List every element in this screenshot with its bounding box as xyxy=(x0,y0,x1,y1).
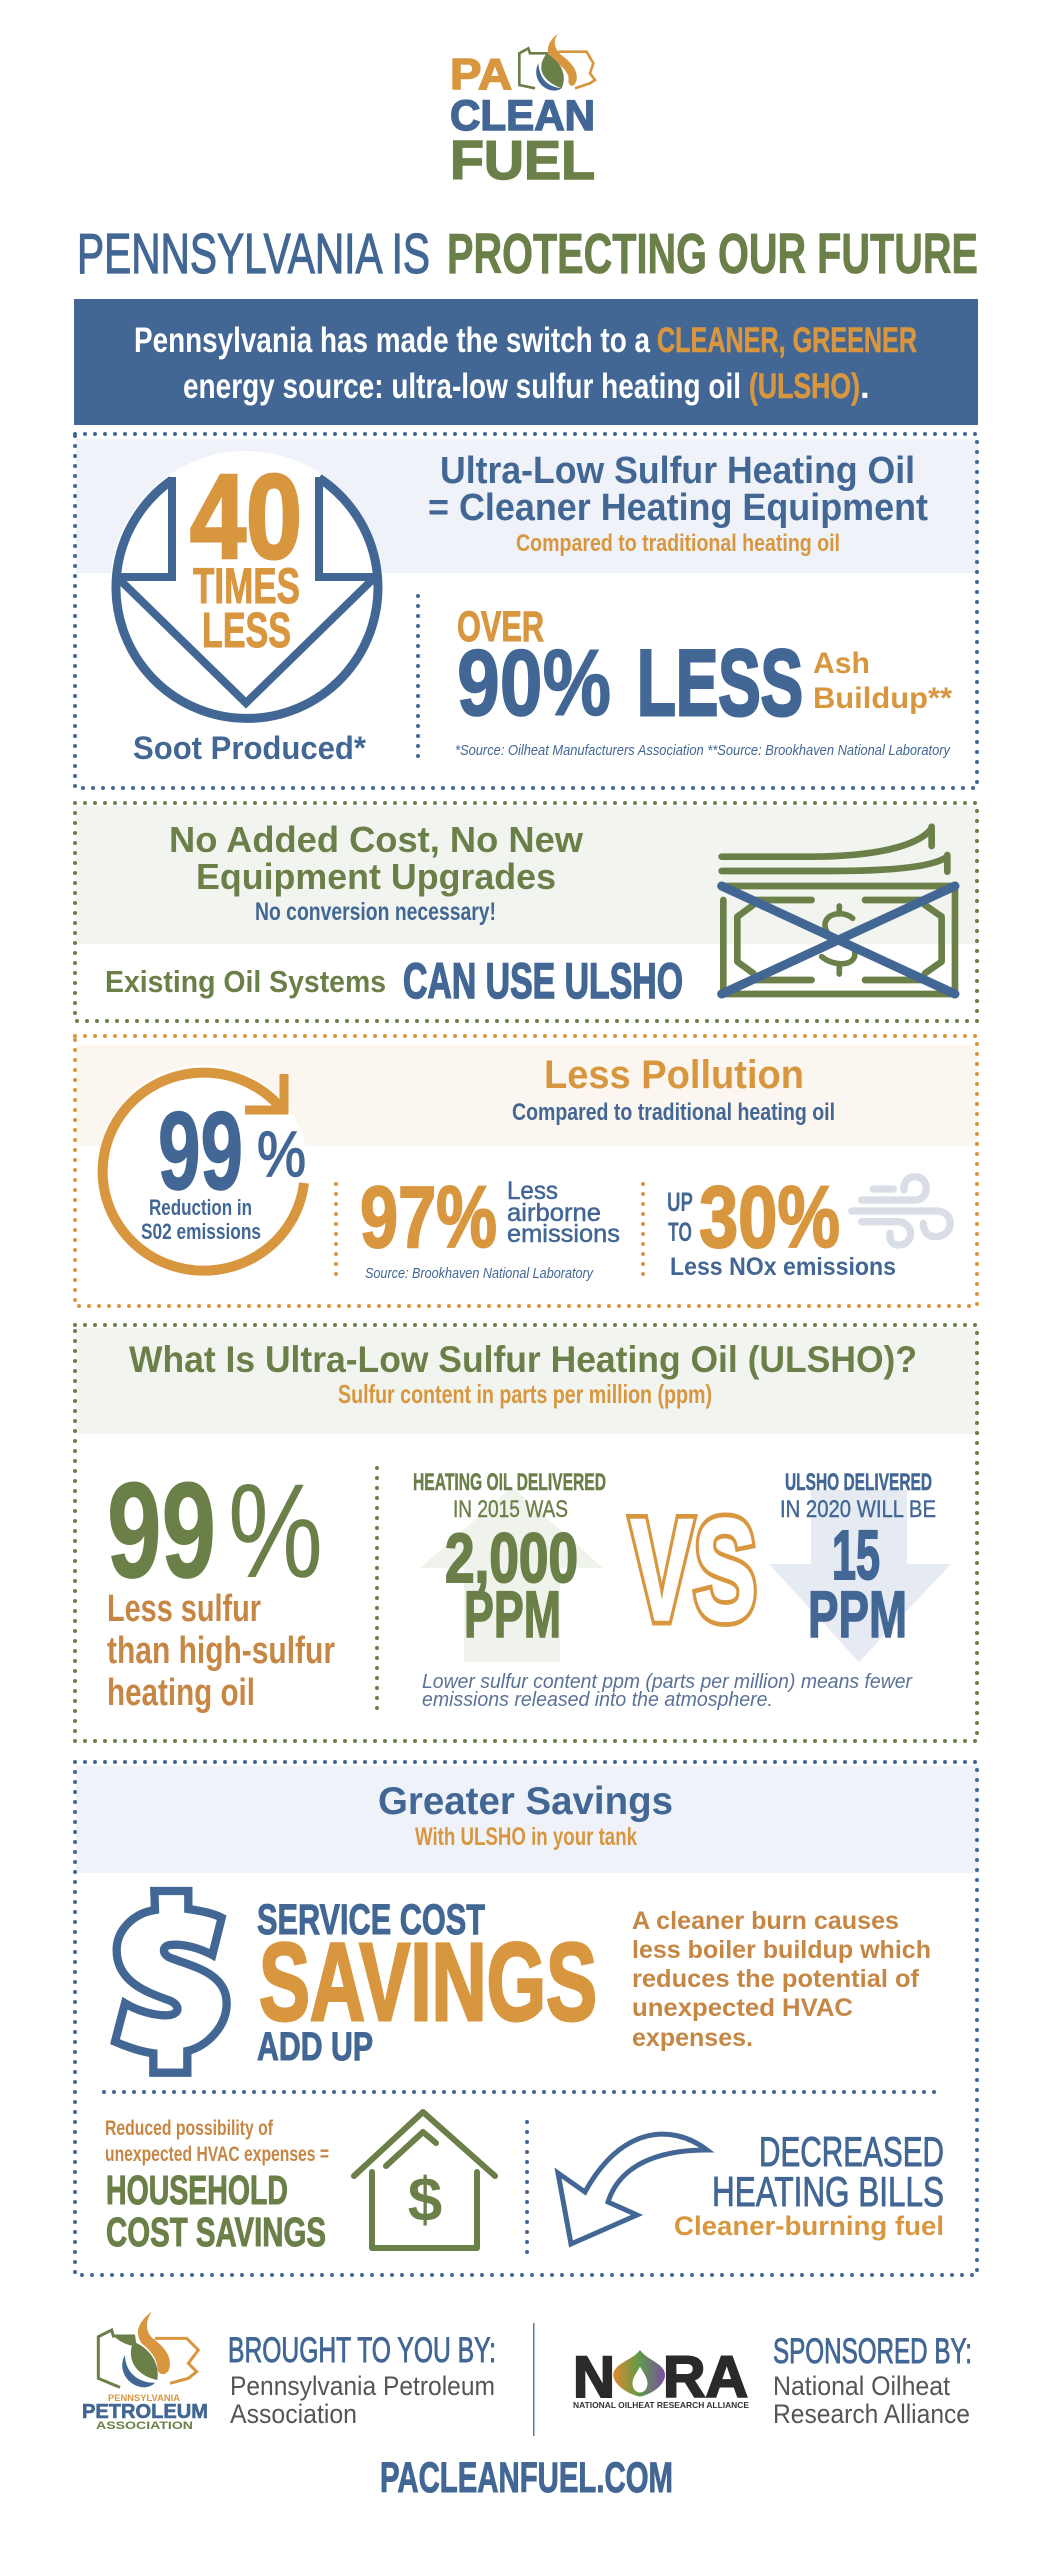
text: household cost savings: unexpected HVAC expenses = xyxy=(105,2143,329,2166)
comparison: 2015 heating oil 2,000 ppm: PPM xyxy=(464,1577,561,1651)
logo: Pennsylvania Petroleum Association: PENNSYLVANIA xyxy=(108,2393,181,2403)
heading: cleaner heating equipment xyxy=(428,450,928,557)
logo: NORA: NATIONAL OILHEAT RESEARCH ALLIANCE xyxy=(573,2400,749,2410)
heading: cleaner heating equipment: Compared to traditional heating oil xyxy=(516,530,840,557)
text: household cost savings: HOUSEHOLD xyxy=(106,2167,288,2213)
text: service cost savings add up: SERVICE COST xyxy=(257,1896,485,1944)
heading: less pollution: Compared to traditional heating oil xyxy=(512,1099,835,1126)
logo: PA Clean Fuel: CLEAN xyxy=(450,92,595,140)
text: existing oil systems can use ULSHO: CAN USE ULSHO xyxy=(403,953,683,1009)
text: decreased heating bills: DECREASED xyxy=(759,2128,944,2175)
note: lower sulfur content: emissions released into the atmosphere. xyxy=(422,1689,773,1711)
stat: 99% less sulfur: Less sulfur xyxy=(107,1588,261,1630)
stat: up to 30% less NOx: UP xyxy=(667,1187,693,1217)
icon: circle with down arrow xyxy=(110,451,382,723)
text: decreased heating bills: HEATING BILLS xyxy=(712,2168,944,2215)
comparison: 2015 heating oil 2,000 ppm: 2,000 xyxy=(445,1519,578,1597)
heading: what is ULSHO xyxy=(129,1339,917,1409)
icon: circular arrow xyxy=(97,1065,309,1277)
intro banner xyxy=(74,299,978,425)
icon: crossed-out money xyxy=(722,827,955,994)
comparison: 2020 ULSHO 15 ppm: IN 2020 WILL BE xyxy=(780,1496,936,1523)
intro banner: energy source: ultra-low sulfur heating oil xyxy=(183,367,741,406)
stat: up to 30% less NOx xyxy=(667,1169,896,1281)
text: sponsored by: Research Alliance xyxy=(773,2399,970,2429)
panel: what is ULSHO xyxy=(75,1325,978,1741)
logo: Pennsylvania Petroleum Association xyxy=(82,2312,208,2432)
heading: no added cost: No conversion necessary! xyxy=(255,898,496,926)
panel: less pollution xyxy=(75,1036,978,1306)
text: cleaner burn paragraph: less boiler buildup which xyxy=(632,1936,931,1964)
source note: *Source: Oilheat Manufacturers Association **Source: Brookhaven National Laboratory xyxy=(455,742,951,759)
intro banner: CLEANER, GREENER xyxy=(657,321,917,360)
heading: cleaner heating equipment: = Cleaner Heating Equipment xyxy=(428,487,928,529)
VS outline xyxy=(630,1488,757,1651)
stat: over 90% less ash buildup: Buildup** xyxy=(813,682,952,715)
text: service cost savings add up: ADD UP xyxy=(257,2025,373,2069)
text: decreased heating bills: Cleaner-burning fuel xyxy=(674,2211,944,2241)
stat: up to 30% less NOx: 30% xyxy=(699,1169,840,1266)
logo: PA Clean Fuel: PA xyxy=(450,50,512,99)
logo: NORA xyxy=(573,2345,749,2410)
heading: greater savings: With ULSHO in your tank xyxy=(415,1823,637,1851)
panel: greater savings xyxy=(75,1762,978,2275)
text: sponsored by: National Oilheat xyxy=(773,2371,950,2401)
comparison: 2020 ULSHO 15 ppm: PPM xyxy=(808,1577,907,1651)
VS outline: VS xyxy=(630,1488,757,1651)
stat: 40 times less: 40 xyxy=(190,450,302,584)
heading: no added cost xyxy=(169,819,584,926)
heading: what is ULSHO: Sulfur content in parts per million (ppm) xyxy=(338,1379,712,1409)
stat: over 90% less ash buildup: OVER xyxy=(457,603,544,651)
heading: greater savings xyxy=(378,1780,673,1851)
logo: NORA: N xyxy=(573,2345,615,2410)
icon: house with dollar xyxy=(354,2112,495,2248)
text: cleaner burn paragraph: expenses. xyxy=(632,2024,753,2052)
stat: 99% reduction: Reduction in xyxy=(149,1195,252,1220)
heading: less pollution: Less Pollution xyxy=(544,1053,804,1097)
note: lower sulfur content xyxy=(422,1671,913,1711)
text: brought to you by: BROUGHT TO YOU BY: xyxy=(228,2331,496,2370)
text: household cost savings: COST SAVINGS xyxy=(106,2209,326,2255)
intro banner: Pennsylvania has made the switch to a xyxy=(134,321,650,360)
comparison: 2015 heating oil 2,000 ppm xyxy=(413,1469,606,1662)
logo: NORA: RA xyxy=(663,2345,748,2410)
stat: 40 times less xyxy=(190,450,302,658)
panel: no added cost xyxy=(75,803,978,1021)
text: decreased heating bills xyxy=(674,2128,944,2241)
note: lower sulfur content: Lower sulfur content ppm (parts per million) means fewer xyxy=(422,1671,913,1693)
heading: no added cost: No Added Cost, No New xyxy=(169,819,584,860)
stat: over 90% less ash buildup: Ash xyxy=(813,647,870,680)
heading: cleaner heating equipment: Ultra-Low Sulfur Heating Oil xyxy=(440,450,915,492)
text: existing oil systems can use ULSHO: Existing Oil Systems xyxy=(105,964,386,999)
text: household cost savings: Reduced possibility of xyxy=(105,2117,274,2140)
icon: house with dollar: $ xyxy=(408,2166,442,2235)
text: sponsored by: SPONSORED BY: xyxy=(773,2332,972,2371)
text: household cost savings xyxy=(105,2117,329,2255)
logo: Pennsylvania Petroleum Association: PETROLEUM xyxy=(82,2401,208,2423)
stat: 99% less sulfur: % xyxy=(228,1457,323,1606)
text: cleaner burn paragraph: unexpected HVAC xyxy=(632,1994,853,2022)
stat: up to 30% less NOx: Less NOx emissions xyxy=(670,1253,896,1281)
heading: greater savings: Greater Savings xyxy=(378,1780,673,1823)
heading: what is ULSHO: What Is Ultra-Low Sulfur Heating Oil (ULSHO)? xyxy=(129,1339,917,1380)
stat: 99% reduction xyxy=(141,1090,306,1244)
stat: 99% reduction: % xyxy=(257,1118,306,1190)
stat: 97% less airborne emissions: 97% xyxy=(360,1169,497,1266)
stat: over 90% less ash buildup: LESS xyxy=(637,630,803,735)
text: cleaner burn paragraph: A cleaner burn causes xyxy=(632,1907,899,1935)
comparison: 2020 ULSHO 15 ppm xyxy=(769,1469,951,1662)
stat: 40 times less: LESS xyxy=(202,604,291,658)
comparison: 2015 heating oil 2,000 ppm: HEATING OIL DELIVERED xyxy=(413,1469,606,1496)
stat: 97% less airborne emissions: emissions xyxy=(507,1220,620,1248)
label: soot produced: Soot Produced* xyxy=(133,730,367,766)
stat: over 90% less ash buildup xyxy=(457,603,952,735)
stat: 40 times less: TIMES xyxy=(193,558,300,614)
stat: 99% less sulfur: than high-sulfur xyxy=(107,1630,335,1672)
stat: 97% less airborne emissions: Less xyxy=(507,1177,558,1205)
stat: over 90% less ash buildup: 90% xyxy=(457,630,611,735)
stat: 97% less airborne emissions: Source: Brookhaven National Laboratory xyxy=(365,1265,594,1282)
website: PACLEANFUEL.COM xyxy=(380,2454,673,2502)
stat: 99% less sulfur xyxy=(107,1454,335,1714)
text: sponsored by xyxy=(773,2332,972,2429)
stat: 99% less sulfur: heating oil xyxy=(107,1672,255,1714)
text: brought to you by xyxy=(228,2331,496,2429)
intro banner: . xyxy=(860,367,870,406)
logo: PA Clean Fuel: FUEL xyxy=(450,129,595,191)
text: brought to you by: Pennsylvania Petroleum xyxy=(230,2371,495,2401)
title: PENNSYLVANIA IS xyxy=(77,222,430,286)
comparison: 2020 ULSHO 15 ppm: ULSHO DELIVERED xyxy=(785,1469,932,1496)
panel: cleaner heating equipment xyxy=(75,434,978,788)
stat: 97% less airborne emissions: airborne xyxy=(507,1199,601,1227)
text: service cost savings add up xyxy=(257,1896,597,2069)
text: existing oil systems can use ULSHO xyxy=(105,953,683,1009)
title xyxy=(77,222,978,286)
text: cleaner burn paragraph xyxy=(632,1907,931,2052)
icon: curved down arrow xyxy=(558,2134,707,2244)
text: brought to you by: Association xyxy=(230,2399,357,2429)
stat: 99% reduction: 99 xyxy=(158,1090,243,1213)
logo: Pennsylvania Petroleum Association: ASSOCIATION xyxy=(96,2420,193,2432)
icon: dollar sign xyxy=(115,1891,227,2073)
text: service cost savings add up: SAVINGS xyxy=(259,1921,597,2044)
VS outline: VS xyxy=(630,1488,757,1651)
stat: 97% less airborne emissions xyxy=(360,1169,620,1282)
comparison: 2015 heating oil 2,000 ppm: IN 2015 WAS xyxy=(453,1496,568,1523)
text: cleaner burn paragraph: reduces the potential of xyxy=(632,1965,920,1993)
icon: wind xyxy=(852,1177,950,1245)
intro banner: (ULSHO) xyxy=(749,367,860,406)
heading: no added cost: Equipment Upgrades xyxy=(196,856,556,897)
comparison: 2020 ULSHO 15 ppm: 15 xyxy=(832,1516,880,1594)
stat: up to 30% less NOx: TO xyxy=(668,1217,692,1247)
heading: less pollution xyxy=(512,1053,835,1126)
stat: 99% less sulfur: 99 xyxy=(107,1454,216,1606)
stat: 99% reduction: S02 emissions xyxy=(141,1219,261,1244)
logo: PA Clean Fuel xyxy=(450,33,595,191)
